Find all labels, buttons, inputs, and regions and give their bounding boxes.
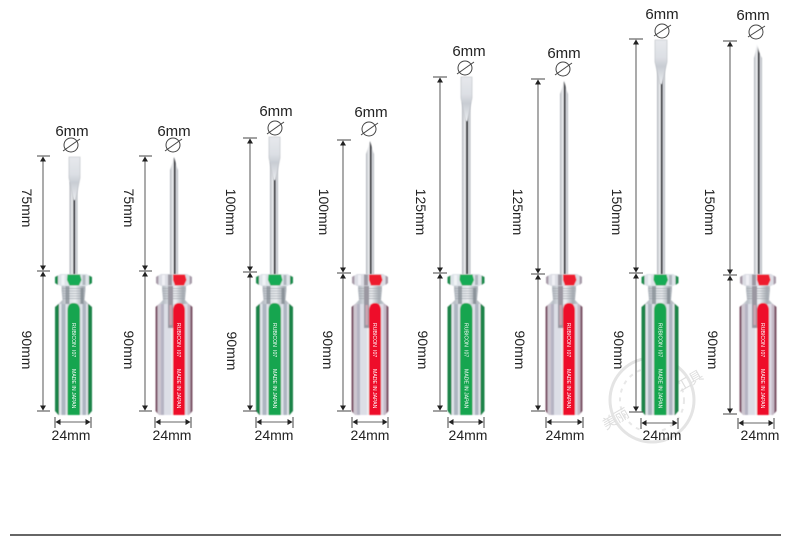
length dimension ticks <box>243 138 257 411</box>
width dimension <box>546 417 583 428</box>
handle print: MADE IN JAPAN <box>371 369 377 409</box>
cross shaft <box>366 141 374 275</box>
width dimension <box>448 417 484 428</box>
shaft <box>70 182 78 275</box>
handle <box>740 274 776 415</box>
label 150mm: 150mm <box>702 189 718 235</box>
handle print: MADE IN JAPAN <box>175 369 181 409</box>
diameter symbol <box>555 62 572 76</box>
handle print <box>462 323 468 409</box>
watermark stamp <box>600 358 706 442</box>
diameter symbol <box>654 24 671 38</box>
handle <box>448 274 484 415</box>
handle print: MADE IN JAPAN <box>271 369 277 409</box>
diameter symbol <box>267 121 284 135</box>
handle print: RUBICON <box>462 323 468 347</box>
length arrows <box>249 139 251 410</box>
handle <box>256 274 293 415</box>
watermark stamp: 美丽 <box>600 405 632 433</box>
diameter label: 6mm <box>736 7 770 24</box>
flat blade <box>461 77 472 121</box>
diameter symbol <box>63 138 80 152</box>
handle print <box>656 323 662 409</box>
width label: 24mm <box>255 427 293 443</box>
handle print <box>759 323 765 409</box>
label 90mm: 90mm <box>121 331 137 369</box>
label 100mm: 100mm <box>316 189 332 235</box>
label 90mm: 90mm <box>19 331 35 369</box>
length arrows <box>439 78 441 410</box>
length dimension ticks <box>337 140 351 411</box>
flat blade <box>69 157 80 200</box>
handle print <box>565 323 571 409</box>
screwdriver 2: red cross 75mm <box>121 123 192 443</box>
handle print <box>70 323 76 409</box>
handle print: I07 <box>565 350 571 357</box>
width label: 24mm <box>546 427 584 443</box>
label 125mm: 125mm <box>510 189 526 235</box>
screwdriver 3: green flat 100mm <box>223 103 293 443</box>
handle <box>642 274 678 415</box>
width dimension <box>55 417 91 428</box>
label 90mm: 90mm <box>611 331 627 369</box>
diameter symbol <box>165 138 182 152</box>
handle print: MADE IN JAPAN <box>565 369 571 409</box>
diameter symbol <box>748 25 765 39</box>
diameter label: 6mm <box>354 104 388 121</box>
length arrows <box>42 157 44 410</box>
handle <box>352 274 388 415</box>
handle <box>156 274 192 415</box>
label 90mm: 90mm <box>512 331 528 369</box>
handle print: RUBICON <box>70 323 76 347</box>
handle print: I07 <box>371 350 377 357</box>
handle print: RUBICON <box>271 323 277 347</box>
label 75mm: 75mm <box>121 189 137 227</box>
diameter label: 6mm <box>645 6 679 23</box>
screwdriver 6: red cross 125mm <box>510 45 584 443</box>
label 90mm: 90mm <box>705 331 721 369</box>
handle print: RUBICON <box>759 323 765 347</box>
shaft <box>657 65 665 275</box>
width dimension <box>352 417 388 428</box>
width dimension <box>155 417 191 428</box>
handle <box>546 274 582 415</box>
label 150mm: 150mm <box>609 189 625 235</box>
diameter label: 6mm <box>547 45 581 62</box>
handle print: RUBICON <box>175 323 181 347</box>
label 75mm: 75mm <box>19 189 35 227</box>
watermark stamp: 工具 <box>674 367 706 395</box>
handle print <box>371 323 377 409</box>
label 90mm: 90mm <box>320 331 336 369</box>
handle print: MADE IN JAPAN <box>759 369 765 409</box>
width label: 24mm <box>741 427 779 443</box>
screwdriver 4: red cross 100mm <box>316 104 389 443</box>
diameter label: 6mm <box>259 103 293 120</box>
width label: 24mm <box>449 427 487 443</box>
width label: 24mm <box>153 427 191 443</box>
length arrows <box>342 141 344 410</box>
label 90mm: 90mm <box>415 331 431 369</box>
flat blade <box>655 40 667 84</box>
width label: 24mm <box>351 427 389 443</box>
length dimension ticks <box>433 77 447 411</box>
diameter symbol <box>457 61 474 75</box>
handle print: I07 <box>759 350 765 357</box>
length dimension ticks <box>37 156 50 411</box>
cross shaft <box>560 81 568 275</box>
screwdriver 5: green flat 125mm <box>413 43 487 443</box>
handle print <box>175 323 181 409</box>
length arrows <box>729 42 731 413</box>
length arrows <box>635 40 637 411</box>
shaft <box>462 102 470 275</box>
diameter symbol <box>361 122 378 136</box>
width label: 24mm <box>643 427 681 443</box>
handle print <box>271 323 277 409</box>
handle print: I07 <box>462 350 468 357</box>
shaft <box>270 162 278 275</box>
screwdriver 1: green flat 75mm <box>19 123 92 443</box>
handle print: RUBICON <box>371 323 377 347</box>
handle print: I07 <box>175 350 181 357</box>
bottom rule <box>10 534 781 536</box>
width dimension <box>738 418 774 429</box>
length arrows <box>537 80 539 410</box>
handle print: MADE IN JAPAN <box>656 369 662 409</box>
screwdriver 8: red cross 150mm <box>702 7 779 443</box>
cross shaft <box>170 157 178 275</box>
handle print: RUBICON <box>656 323 662 347</box>
label 90mm: 90mm <box>224 332 240 370</box>
handle print: MADE IN JAPAN <box>70 369 76 409</box>
length arrows <box>144 157 146 410</box>
length dimension ticks <box>531 79 545 411</box>
handle print: RUBICON <box>565 323 571 347</box>
diameter label: 6mm <box>157 123 191 140</box>
diameter label: 6mm <box>55 123 89 140</box>
cross shaft <box>754 44 762 275</box>
length dimension ticks <box>629 39 643 412</box>
handle print: I07 <box>656 350 662 357</box>
handle print: I07 <box>70 350 76 357</box>
label 100mm: 100mm <box>223 189 239 235</box>
width label: 24mm <box>52 427 90 443</box>
length dimension ticks <box>139 156 152 411</box>
label 125mm: 125mm <box>413 189 429 235</box>
width dimension <box>256 417 293 428</box>
screwdriver 7: green flat 150mm <box>609 6 681 443</box>
length dimension ticks <box>723 41 737 414</box>
flat blade <box>269 137 280 180</box>
handle print: MADE IN JAPAN <box>462 369 468 409</box>
handle <box>55 274 92 415</box>
width dimension <box>641 418 678 429</box>
diameter label: 6mm <box>452 43 486 60</box>
handle print: I07 <box>271 350 277 357</box>
